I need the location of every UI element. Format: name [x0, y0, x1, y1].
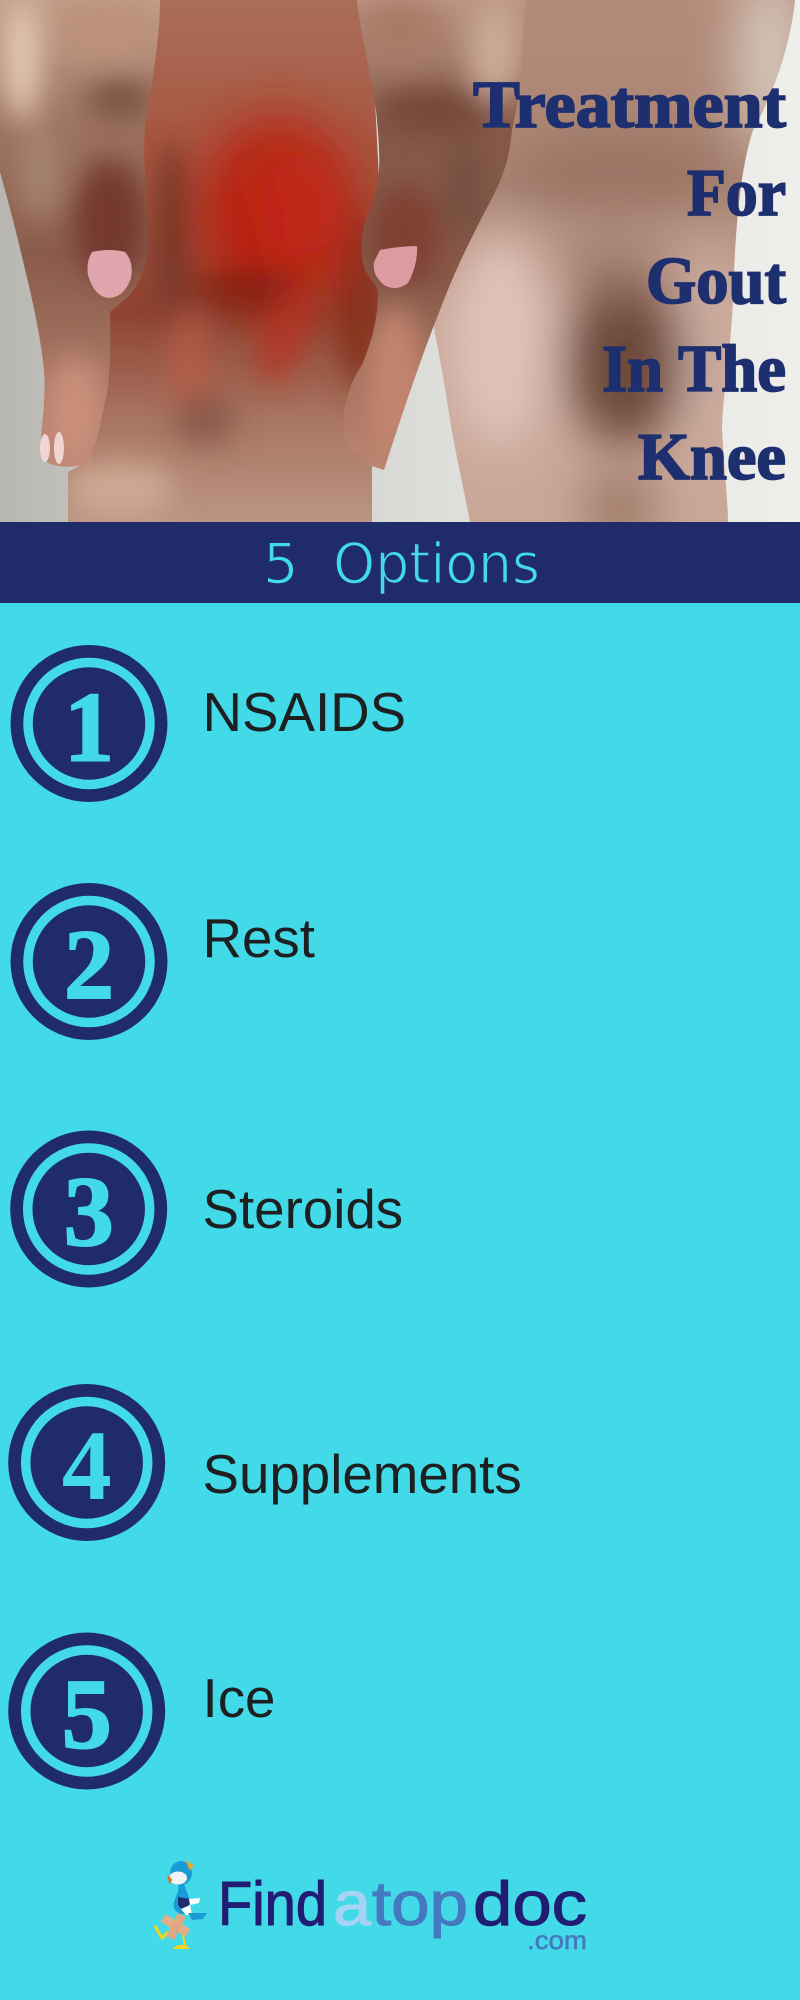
title	[473, 68, 787, 494]
label: Steroids	[202, 1178, 403, 1240]
wordmark	[218, 1870, 587, 1955]
number badge 2: 2	[64, 909, 114, 1020]
number badge 3: 3	[64, 1156, 114, 1267]
wordmark: Find	[218, 1870, 327, 1939]
title: In The	[602, 332, 786, 406]
number badge 2	[10, 883, 168, 1040]
number badge 4	[8, 1384, 165, 1541]
logo: Findatopdoc.com	[155, 1861, 587, 1955]
wordmark: a	[333, 1870, 372, 1939]
option 4: Supplements	[8, 1384, 522, 1541]
option 2: Rest	[10, 883, 315, 1040]
title: Gout	[646, 244, 787, 318]
number badge 1	[10, 645, 168, 802]
option 3: Steroids	[10, 1130, 403, 1288]
banner	[0, 522, 800, 603]
icon: duck mascot with bandage	[155, 1861, 207, 1949]
title: Knee	[638, 420, 786, 494]
thumbnail left	[88, 250, 132, 298]
wordmark: top	[372, 1870, 468, 1939]
thumbnail right	[374, 246, 417, 288]
option 1: NSAIDS	[10, 645, 406, 802]
banner label: 5 Options: 5	[263, 532, 299, 597]
title: Treatment	[473, 68, 787, 142]
number badge 5	[8, 1632, 165, 1790]
number badge 1: 1	[64, 672, 114, 782]
wordmark: .com	[527, 1925, 587, 1955]
option 5: Ice	[8, 1632, 275, 1790]
number badge 4: 4	[62, 1410, 112, 1521]
title: For	[687, 156, 786, 230]
label: Rest	[202, 907, 315, 969]
photo: hands holding a red inflamed knee	[0, 0, 800, 550]
fingernails lower left	[40, 432, 64, 464]
label: NSAIDS	[202, 681, 406, 743]
banner label: 5 Options: Options	[333, 532, 540, 597]
number badge 3	[10, 1130, 167, 1288]
label: Supplements	[202, 1443, 522, 1505]
label: Ice	[202, 1667, 275, 1729]
wordmark: doc	[473, 1870, 587, 1939]
number badge 5: 5	[62, 1658, 112, 1770]
